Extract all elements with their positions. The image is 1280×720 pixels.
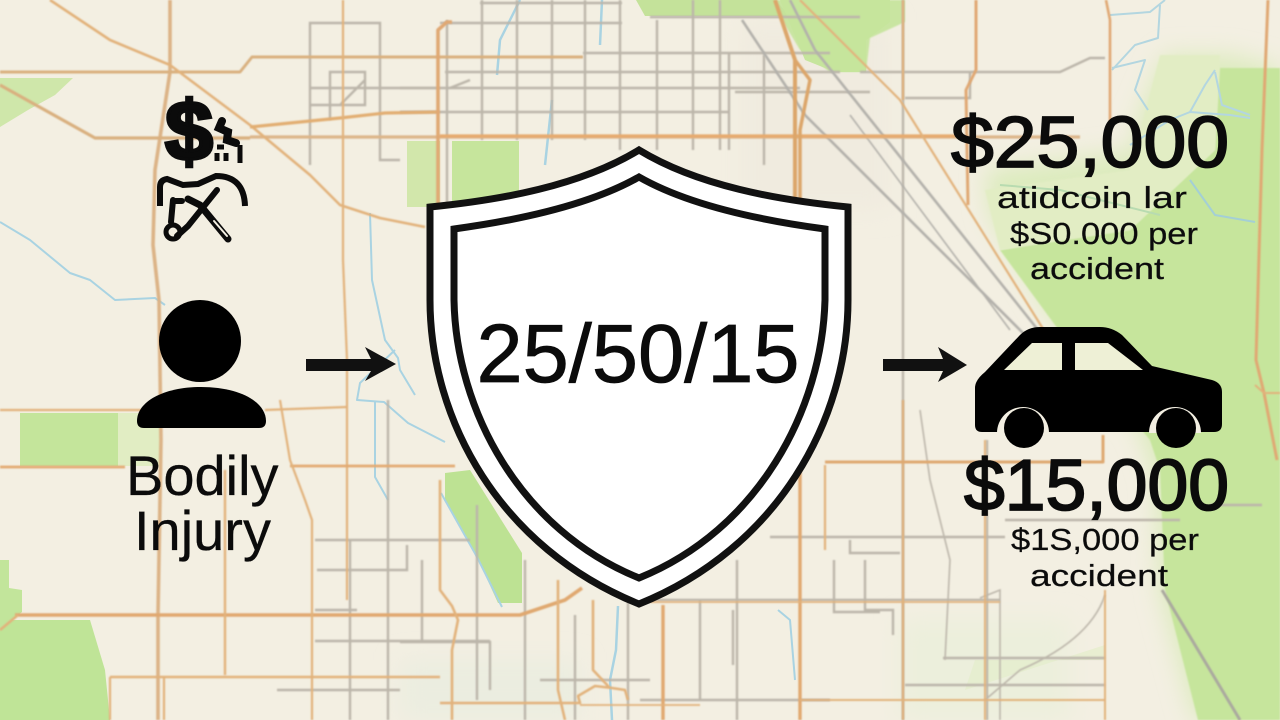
caption: per person: accident <box>1030 251 1164 286</box>
caption: per accident: $1S,000 per <box>1011 522 1199 557</box>
caption: per accident <box>1011 522 1199 593</box>
caption: per person: $S0.000 per <box>1010 216 1198 251</box>
icon: money and tools: $ <box>165 84 213 178</box>
coverage limits: 25/50/15 <box>476 307 800 400</box>
map pale urban areas <box>400 20 1070 720</box>
panel: property damage amounts <box>964 446 1229 593</box>
shield <box>430 150 848 604</box>
label: bodily injury: Injury <box>134 499 271 562</box>
amount: $25,000: $25,000 <box>951 103 1229 183</box>
label: bodily injury <box>126 444 279 562</box>
arrow: to car <box>883 347 967 382</box>
map rail corridor <box>742 0 1050 345</box>
icon: person <box>137 300 266 428</box>
panel: bodily injury amounts <box>951 103 1229 286</box>
caption: per accident: accident <box>1030 558 1168 593</box>
icon: money and tools <box>160 84 245 239</box>
label: bodily injury: Bodily <box>126 444 279 507</box>
icon: car <box>975 327 1222 448</box>
caption: per person: atidcoin lar <box>997 180 1187 215</box>
arrow: to shield <box>306 347 396 381</box>
map minor roads <box>277 0 1262 720</box>
amount: $15,000: $15,000 <box>964 446 1229 526</box>
panel: bodily injury <box>126 84 279 562</box>
caption: per person <box>997 180 1198 286</box>
